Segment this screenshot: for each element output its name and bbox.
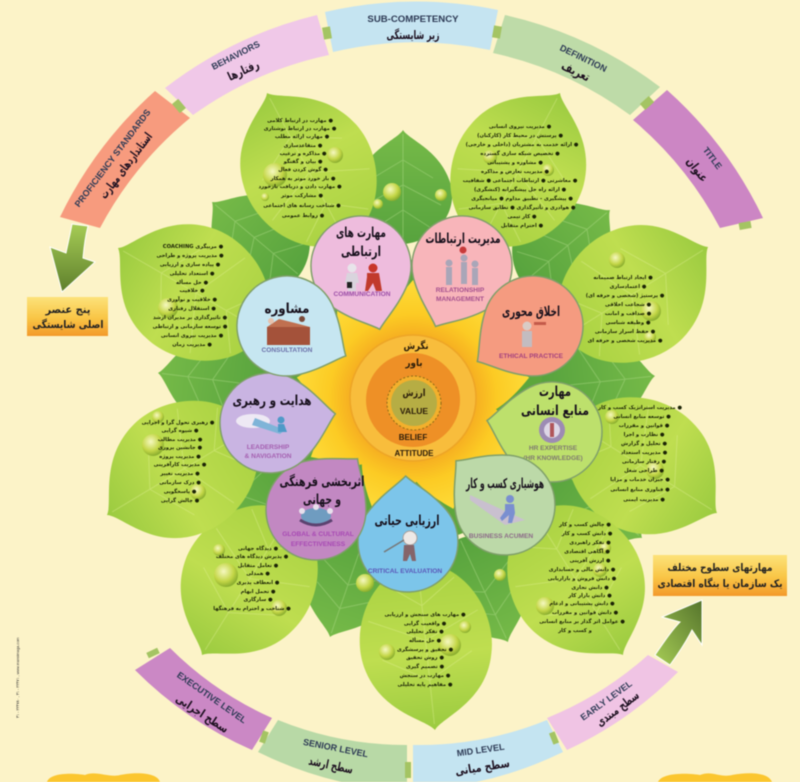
arc segment: definition: DEFINITION bbox=[558, 43, 608, 74]
leaf: bottom left bbox=[283, 513, 414, 653]
leaf text: leadership and navigation: ● درک سازمانی bbox=[159, 479, 201, 486]
leaf text: communication: ● گوش کردن فعال bbox=[278, 166, 328, 173]
arc segment: early level bbox=[547, 655, 678, 750]
flower disc: attitude, belief, value: ارزش bbox=[402, 388, 426, 399]
droplet: global effectiveness: و جهانی bbox=[303, 492, 341, 508]
leaf text: business acumen: ● دانش قوانین و مقررات bbox=[552, 610, 618, 616]
leaf text: relationship management: ● پیشگیری - تطبیق مداوم ● میانجیگری bbox=[471, 195, 573, 202]
leaf text: relationship management: ● معاشرتی ● ارتباطات اجتماعی ● شفافیت bbox=[463, 178, 578, 184]
leaf text: leadership and navigation: ● جانشین پروری bbox=[158, 445, 202, 451]
box: levels of skills bbox=[653, 555, 787, 596]
droplet: business acumen bbox=[422, 424, 576, 576]
leaf: right top bbox=[491, 172, 642, 321]
leaf text: business acumen: ● دانش مالی و حسابداری bbox=[549, 567, 616, 573]
leaf text: HR expertise: ● فناوری منابع انسانی bbox=[610, 487, 670, 493]
leaf 7 shape bbox=[146, 478, 347, 690]
leaf text: business acumen: ● دانش پشتیبانی و ادغام bbox=[549, 601, 615, 607]
arc segment: mid level bbox=[413, 720, 563, 782]
icon: three linked figures bbox=[446, 246, 478, 285]
droplet: HR expertise bbox=[478, 371, 610, 490]
leaf text: critical evaluation bbox=[384, 612, 466, 688]
arc segment: sub-competency: SUB-COMPETENCY bbox=[367, 14, 459, 25]
droplet: ethical practice: ETHICAL PRACTICE bbox=[499, 353, 564, 360]
leaf text: HR expertise: ● قوانین و مقررات bbox=[619, 423, 670, 429]
water drops bbox=[142, 147, 664, 660]
droplet: leadership and navigation: هدایت و رهبری bbox=[232, 393, 312, 409]
leaf text: HR expertise bbox=[597, 404, 682, 503]
leaf text: business acumen: ● دانش تجاری bbox=[571, 585, 609, 591]
leaf text: communication: ● مذاکره و ترغیب bbox=[280, 151, 327, 157]
droplet: relationship management: RELATIONSHIP bbox=[436, 287, 485, 294]
droplet: business acumen: هوشیاری کسب و کار bbox=[465, 476, 544, 492]
leaf text: leadership and navigation: ● رهبری تحول گرا و اجرایی bbox=[142, 419, 215, 426]
droplet: critical evaluation bbox=[356, 474, 460, 594]
box: five core elements bbox=[27, 297, 108, 336]
box: levels of skills: یک سازمان یا بنگاه اقتصادی bbox=[658, 577, 783, 590]
droplet: communication bbox=[299, 204, 428, 343]
arc segment: title: TITLE bbox=[701, 145, 724, 171]
leaf text: HR expertise: ● مدیریت ایمنی bbox=[623, 497, 665, 503]
leaf text: HR expertise: ● مدیریت استراتژیک کسب و کار bbox=[597, 404, 682, 411]
icon: leader figure with cloud bbox=[236, 414, 287, 434]
leaf 3 shape bbox=[531, 191, 743, 392]
icon: figures around table bbox=[267, 316, 310, 345]
droplet: HR expertise: HR EXPERTISE bbox=[529, 445, 578, 452]
box: five core elements: اصلی شایستگی bbox=[32, 318, 104, 331]
leaf text: communication: ● مهارت دادن و دریافت بازخورد bbox=[258, 184, 342, 190]
value circle bbox=[387, 376, 441, 430]
leaf text: relationship management: ● احترام متقابل bbox=[501, 223, 544, 229]
droplet: consultation: CONSULTATION bbox=[262, 347, 313, 354]
leaf text: HR expertise: ● رفتار سازمانی bbox=[622, 459, 666, 465]
icon: globe with people bbox=[299, 504, 333, 525]
arc segment: executive level bbox=[135, 648, 272, 750]
box: five core elements: پنج عنصر bbox=[45, 304, 91, 316]
leaf text: global effectiveness: ● تعامل متقابل bbox=[238, 563, 279, 569]
leaf 4 shape bbox=[540, 368, 752, 569]
arc segment: senior level bbox=[258, 720, 407, 782]
leaf text: ethical practice: ● وظیفه شناسی bbox=[606, 320, 651, 326]
leaf text: global effectiveness: ● تحمل ابهام bbox=[241, 589, 276, 595]
droplet: leadership and navigation: LEADERSHIP bbox=[247, 444, 290, 451]
leaf 9 shape bbox=[85, 191, 297, 389]
leaf text: critical evaluation: ● حل مسأله bbox=[409, 637, 441, 644]
leaf text: consultation: ● استقلال رفتاری bbox=[168, 306, 216, 312]
leaf text: consultation bbox=[153, 243, 228, 348]
leaf text: critical evaluation: ● تفکر تحلیلی bbox=[406, 629, 444, 635]
droplet: communication: COMMUNICATION bbox=[333, 291, 391, 298]
leaf text: communication: ● روابط عمومی bbox=[282, 213, 325, 219]
leaf: right low bbox=[523, 427, 674, 576]
leaf text: business acumen: ● ارزش آفرینی bbox=[570, 556, 611, 564]
dark background leaves bbox=[152, 130, 674, 663]
icon: walking figure on path bbox=[470, 495, 525, 525]
droplet: global effectiveness: GLOBAL & CULTURAL bbox=[282, 531, 354, 538]
droplet: global effectiveness: اثربخشی فرهنگی bbox=[280, 473, 364, 490]
leaf: left top bbox=[180, 164, 331, 313]
leaf text: relationship management: ● مدیریت تعارض و مذاکره bbox=[481, 169, 549, 175]
leaf text: consultation: ● استعداد تحلیلی bbox=[170, 271, 215, 277]
icon: figure with scales bbox=[522, 322, 546, 347]
leaf text: ethical practice bbox=[586, 275, 665, 344]
droplet: relationship management bbox=[390, 200, 528, 346]
leaf text: ethical practice: ● حفظ اسرار سازمانی bbox=[595, 329, 656, 335]
leaf: right bbox=[536, 327, 660, 437]
arrow: down to five elements box bbox=[50, 224, 95, 292]
leaf text: HR expertise: ● جبران خدمات و مزایا bbox=[610, 477, 670, 483]
flower disc: attitude, belief, value: ATTITUDE bbox=[395, 449, 434, 458]
leaf text: critical evaluation: ● روش تحقیق bbox=[406, 655, 444, 661]
leaf text: consultation: ● مربیگری COACHING bbox=[163, 243, 224, 250]
leaf text: business acumen: ● عوامل اثر گذار بر منابع انسانی bbox=[539, 618, 625, 625]
leaf text: business acumen: ● دانش فروش و بازاریابی bbox=[548, 576, 617, 582]
arc segment: executive level: سطح اجرایی bbox=[173, 691, 231, 736]
top arc band bbox=[60, 2, 763, 230]
leaf text: consultation: ● تاثیرگذاری بر مدیران ارشد bbox=[153, 314, 228, 321]
flower disc: attitude, belief, value: نگرش bbox=[404, 339, 428, 352]
leaf text: leadership and navigation bbox=[142, 419, 215, 504]
leaf text: business acumen: ● تفکر راهبردی bbox=[569, 540, 611, 546]
leaf text: relationship management: ● مشاوره و پشتیبانی bbox=[487, 160, 543, 166]
leaf text: HR expertise: ● طراحی شغل bbox=[624, 468, 664, 474]
leaf text: leadership and navigation: ● مدیریت پروژه bbox=[159, 454, 201, 460]
leaf text: ethical practice: ● پرستیژ (شخصی و حرفه ای) bbox=[586, 293, 665, 299]
leaf text: HR expertise: ● نظارت و اجرا bbox=[624, 432, 665, 438]
vertical small print: ۳۱ - ۲۲۴۷۸۰ , ۳۱ - ۲۲۴۷۱ , www.mansimaga.com bbox=[16, 637, 20, 718]
leaf text: communication: ● متقاعدسازی bbox=[284, 143, 323, 149]
droplet: leadership and navigation bbox=[214, 364, 342, 479]
leaf text: consultation: ● مدیریت نیروی انسانی bbox=[161, 333, 224, 339]
leaf 2 shape bbox=[423, 62, 618, 272]
leaf text: relationship management: ● کار تیمی bbox=[508, 214, 537, 220]
leaf text: consultation: ● مدیریت زمان bbox=[172, 342, 212, 348]
leaf text: global effectiveness: ● همدلی bbox=[246, 571, 270, 577]
leaf text: communication: ● مهارت در ارتباط نوشتاری bbox=[264, 126, 337, 132]
leaf text: communication: ● شناخت رسانه های اجتماعی bbox=[263, 203, 341, 209]
leaf text: business acumen bbox=[539, 522, 625, 634]
bottom connector tabs bbox=[146, 648, 559, 778]
arc segment: early level: EARLY LEVEL bbox=[579, 678, 634, 723]
leaf text: consultation: ● توسعه سازمانی و ارتباطی bbox=[153, 324, 228, 330]
leaf text: global effectiveness: ● انعطاف پذیری bbox=[237, 580, 280, 586]
leaf 5 shape bbox=[478, 478, 679, 690]
leaf text: critical evaluation: ● مفاهیم پایه تحلیلی bbox=[398, 682, 453, 688]
leaf text: relationship management: ● ارائه راه حل پیشگیرانه (کنشگری) bbox=[474, 186, 567, 193]
leaf text: consultation: ● حل مسأله bbox=[176, 279, 208, 286]
leaf text: relationship management: ● هوادری و تأثیرگذاری ● تطابق سازمانی bbox=[469, 204, 576, 211]
arc segment: proficiency standards: PROFICIENCY STANDARDS bbox=[73, 107, 153, 209]
leaf text: global effectiveness: ● پذیرش دیدگاه های مختلف bbox=[216, 553, 289, 560]
droplet: HR expertise: (HR KNOWLEDGE) bbox=[523, 455, 583, 462]
leaf text: ethical practice: ● مدیریت شخصی و حرفه ای bbox=[588, 338, 663, 344]
arc segment: sub-competency bbox=[325, 2, 498, 52]
leaf text: global effectiveness: ● شناخت و احترام به فرهنگها bbox=[213, 605, 291, 612]
leaf text: business acumen: ● آگاهی اقتصادی bbox=[564, 547, 610, 555]
leaf text: consultation: ● خلاقیت و نوآوری bbox=[167, 295, 217, 303]
droplet: business acumen: BUSINESS ACUMEN bbox=[469, 533, 533, 540]
arc segment: senior level: SENIOR LEVEL bbox=[302, 737, 369, 759]
arc segment: definition: تعریف bbox=[559, 59, 592, 84]
droplet: HR expertise: مهارت bbox=[539, 384, 571, 400]
flower disc: attitude, belief, value: VALUE bbox=[400, 406, 428, 416]
leaf text: relationship management: ● پرستش در محیط کار (کارکنان) bbox=[477, 133, 563, 139]
leaf text: leadership and navigation: ● مدیریت مطالب bbox=[158, 437, 203, 443]
droplet: consultation bbox=[220, 259, 369, 401]
leaf text: communication: ● مهارت در ارتباط کلامی bbox=[267, 118, 333, 124]
leaf text: HR expertise: ● مدیریت استعداد bbox=[621, 450, 668, 456]
leaf text: business acumen: ● دانش بازار کار bbox=[567, 593, 612, 599]
droplet: global effectiveness bbox=[246, 427, 396, 580]
leaf text: leadership and navigation: ● مدیریت کارآفرینی bbox=[154, 460, 207, 468]
droplet: critical evaluation: CRITICAL EVALUATION bbox=[368, 568, 442, 575]
leaf text: communication: ● باز خورد موثر به همکار bbox=[270, 176, 336, 182]
arc segment: behaviors bbox=[165, 15, 329, 115]
leaf text: critical evaluation: ● مهارت های سنجش و ارزیابی bbox=[384, 612, 466, 618]
leaf text: ethical practice: ● اعتمادسازی bbox=[610, 284, 647, 290]
droplet: relationship management: MANAGEMENT bbox=[436, 296, 484, 303]
leaf text: consultation: ● خلاقیت bbox=[179, 288, 205, 294]
leaf text: communication bbox=[258, 118, 342, 219]
flower disc: attitude, belief, value bbox=[350, 335, 476, 461]
icon: people globe bbox=[539, 417, 565, 443]
droplet: critical evaluation: ارزیابی حیاتی bbox=[374, 513, 440, 529]
arc segment: sub-competency: زیر شایستگی bbox=[386, 28, 440, 42]
leaf text: leadership and navigation: ● پاسخگویی bbox=[164, 488, 197, 495]
leaf: left bbox=[152, 324, 277, 436]
arc segment: mid level: سطح میانی bbox=[454, 756, 511, 778]
arc segment: executive level: EXECUTIVE LEVEL bbox=[175, 670, 249, 726]
droplet: communication: مهارت های bbox=[336, 225, 386, 241]
leaf text: critical evaluation: ● مهارت در سنجش bbox=[400, 673, 451, 679]
leaf text: relationship management: ● تخصیص شبکه سازی گسترده bbox=[480, 150, 560, 157]
bottom arc band bbox=[135, 648, 678, 782]
leaf text: communication: ● مشارکت موثر bbox=[280, 193, 323, 199]
green backing disc bbox=[266, 260, 550, 544]
leaf text: global effectiveness: ● سازگاری bbox=[243, 596, 273, 603]
leaf text: HR expertise: ● توسعه منابع انسانی bbox=[613, 414, 671, 420]
flower disc: attitude, belief, value: BELIEF bbox=[399, 433, 427, 442]
arc segment: senior level: سطح ارشد bbox=[307, 754, 354, 777]
arc segment: definition bbox=[493, 15, 660, 115]
leaf: bottom right bbox=[415, 518, 553, 663]
droplet: global effectiveness: EFFECTIVENESS bbox=[291, 541, 346, 548]
leaf text: ethical practice: ● صداقت و امانت bbox=[605, 311, 652, 317]
arc segment: proficiency standards: استانداردهای مهارت bbox=[96, 130, 155, 201]
arc segment: title: عنوان bbox=[683, 155, 711, 185]
leaf 8 shape bbox=[73, 372, 285, 572]
arrow: up to levels box bbox=[655, 600, 702, 665]
leaf 6 shape bbox=[352, 556, 501, 737]
droplet: ethical practice bbox=[450, 257, 602, 404]
leaf text: leadership and navigation: ● مدیریت تغییر bbox=[159, 471, 200, 477]
arc segment: title bbox=[633, 90, 763, 228]
droplet: relationship management: مدیریت ارتباطات bbox=[426, 231, 500, 247]
leaf text: global effectiveness bbox=[213, 545, 291, 612]
arc segment: proficiency standards bbox=[60, 91, 190, 228]
leaf text: consultation: ● پیاده سازی و ارزیابی bbox=[160, 262, 221, 268]
droplet: communication: ارتباطی bbox=[341, 244, 381, 260]
leaf text: relationship management: ● مدیریت نیروی انسانی bbox=[489, 124, 552, 130]
droplet: HR expertise: منابع انسانی bbox=[521, 403, 589, 419]
leaf text: global effectiveness: ● دیدگاه جهانی bbox=[238, 545, 279, 552]
leaf text: ethical practice: ● ایجاد ارتباط صمیمانه bbox=[593, 275, 653, 281]
leaf text: HR expertise: ● تحلیل و گزارش bbox=[621, 440, 667, 447]
leaf text: critical evaluation: ● واقعیت گرایی bbox=[404, 620, 447, 627]
arc segment: behaviors: رفتارها bbox=[225, 57, 261, 84]
light text leaves bbox=[73, 62, 752, 737]
droplet: ethical practice: اخلاق محوری bbox=[502, 304, 560, 320]
droplet: leadership and navigation: & NAVIGATION bbox=[244, 453, 292, 460]
box: levels of skills: مهارتهای سطوح مختلف bbox=[668, 562, 772, 574]
arc segment: behaviors: BEHAVIORS bbox=[210, 39, 261, 72]
leaf 1 shape bbox=[209, 62, 404, 272]
icon: figure with magnifier bbox=[384, 531, 417, 561]
sunflower petals bbox=[292, 280, 534, 519]
leaf: left low bbox=[164, 418, 315, 568]
leaf text: leadership and navigation: ● چالش گرایی bbox=[161, 497, 200, 504]
leaf text: leadership and navigation: ● شیوه گرایی bbox=[162, 427, 199, 434]
arc segment: mid level: MID LEVEL bbox=[456, 742, 506, 758]
leaf text: relationship management: ● ارائه خدمت به مشتریان (داخلی و خارجی) bbox=[466, 142, 579, 148]
leaf text: ethical practice: ● شجاعت اخلاقی bbox=[605, 302, 652, 308]
arc connector tabs bbox=[172, 25, 752, 230]
leaf text: relationship management bbox=[463, 124, 579, 229]
arc segment: early level: سطح مبتدی bbox=[593, 688, 642, 729]
flower disc: attitude, belief, value: باور bbox=[405, 358, 422, 369]
leaf text: consultation: ● مدیریت پروژه و طراحی bbox=[156, 253, 224, 259]
icon: handshake figures bbox=[345, 264, 382, 291]
leaf text: communication: ● مهارت ارائه مطلب bbox=[275, 134, 330, 140]
leaf text: business acumen: و کسب و کار bbox=[557, 628, 592, 634]
leaf text: communication: ● بیان و گفتگو bbox=[283, 158, 323, 165]
leaf text: business acumen: ● چالش کسب و کار bbox=[558, 522, 611, 528]
leaf text: critical evaluation: ● تصمیم گیری bbox=[406, 663, 444, 670]
leaf text: critical evaluation: ● تحقیق و پرسشگری bbox=[397, 646, 453, 653]
leaf text: business acumen: ● دانش کسب و کار bbox=[561, 531, 613, 537]
leaf: top bbox=[354, 130, 452, 244]
bottom yellow scallops bbox=[47, 773, 772, 782]
droplet: consultation: مشاوره bbox=[264, 301, 310, 317]
